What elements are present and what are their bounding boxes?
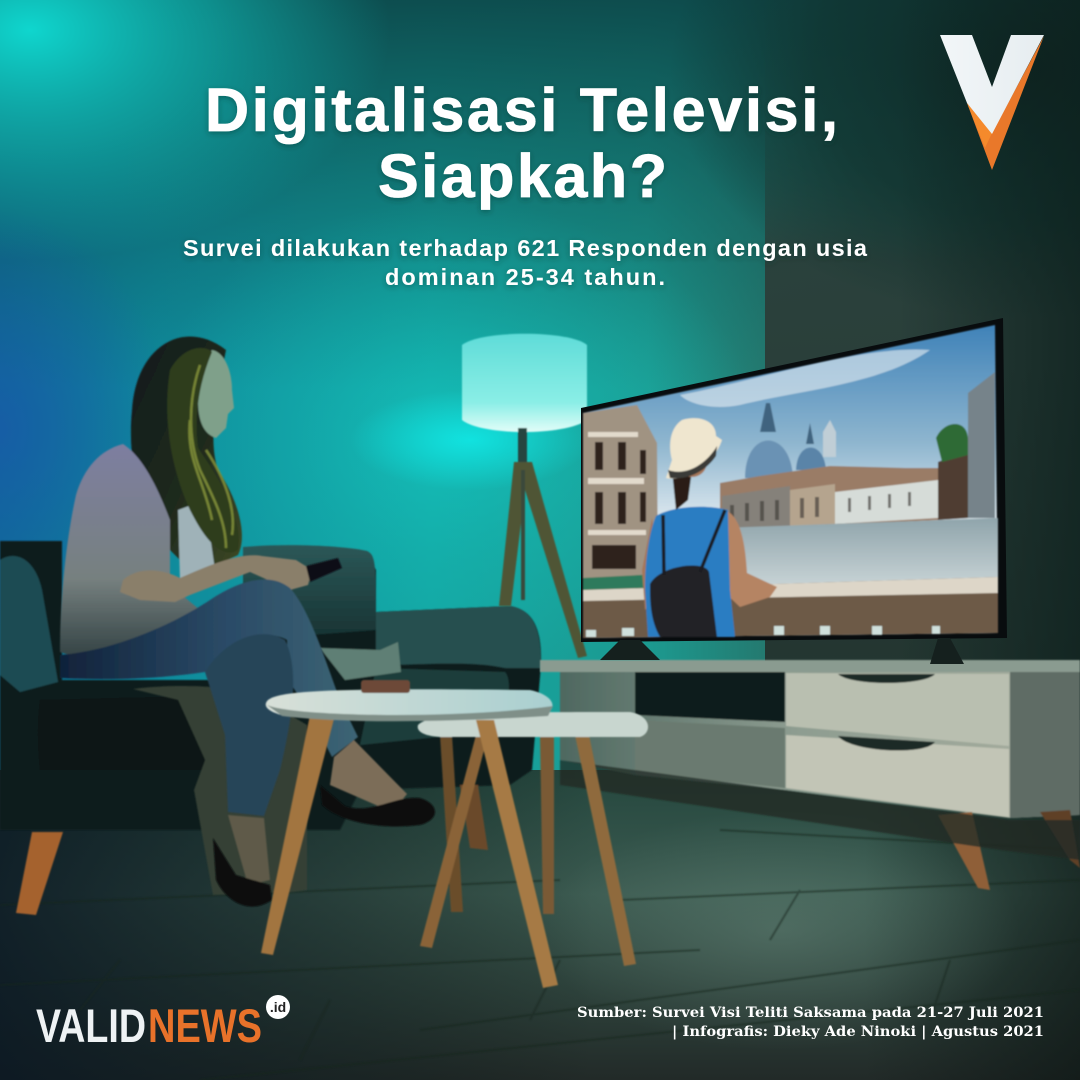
torso sweater xyxy=(60,444,200,668)
title line two: Siapkah? xyxy=(378,142,667,210)
logo: Validnews.id: .id xyxy=(270,999,286,1015)
sofa xyxy=(0,541,541,915)
jeans: lower leg xyxy=(205,634,293,816)
logo: Validnews.id: VALID xyxy=(36,999,146,1052)
woman xyxy=(60,337,435,907)
tourist arms xyxy=(642,518,662,610)
television xyxy=(581,318,1007,664)
city buildings xyxy=(720,466,938,530)
backpack xyxy=(650,566,717,637)
subtitle: Survei dilakukan terhadap 621 Responden dengan usia xyxy=(183,235,868,261)
logo: Validnews.id xyxy=(36,995,290,1052)
tv screen scene xyxy=(583,325,998,638)
remote xyxy=(306,558,342,582)
hair back xyxy=(131,337,242,575)
face xyxy=(198,350,234,438)
tv stand xyxy=(540,660,1080,890)
throw blanket xyxy=(133,686,307,895)
tourist hair braid xyxy=(672,470,692,510)
hat xyxy=(666,418,722,479)
crossed hand and forearm xyxy=(120,555,312,602)
distant domes xyxy=(745,440,793,478)
title: Digitalisasi Televisi, xyxy=(205,76,838,144)
left building xyxy=(583,405,658,590)
hair strands with highlights xyxy=(167,348,239,553)
logo: Validnews.id: NEWS xyxy=(148,999,262,1052)
floor lamp xyxy=(462,334,587,658)
phone on table xyxy=(361,680,410,693)
ankle and shoe lower xyxy=(228,815,270,885)
floor xyxy=(0,770,1080,1080)
tourist dress xyxy=(645,507,735,637)
infographic credit: | Infografis: Dieky Ade Ninoki | Agustus 2021 xyxy=(672,1024,1044,1040)
jeans: thigh and shin xyxy=(60,579,358,757)
shirt front xyxy=(178,500,215,580)
balustrade xyxy=(583,577,998,638)
logo: V mark xyxy=(940,35,1044,170)
subtitle line two: dominan 25-34 tahun. xyxy=(385,264,665,290)
ankle and shoe right xyxy=(330,740,407,812)
source credit: Sumber: Survei Visi Teliti Saksama pada 21-27 Juli 2021 xyxy=(577,1005,1044,1021)
canal water xyxy=(720,518,998,590)
nesting tables xyxy=(261,680,648,988)
